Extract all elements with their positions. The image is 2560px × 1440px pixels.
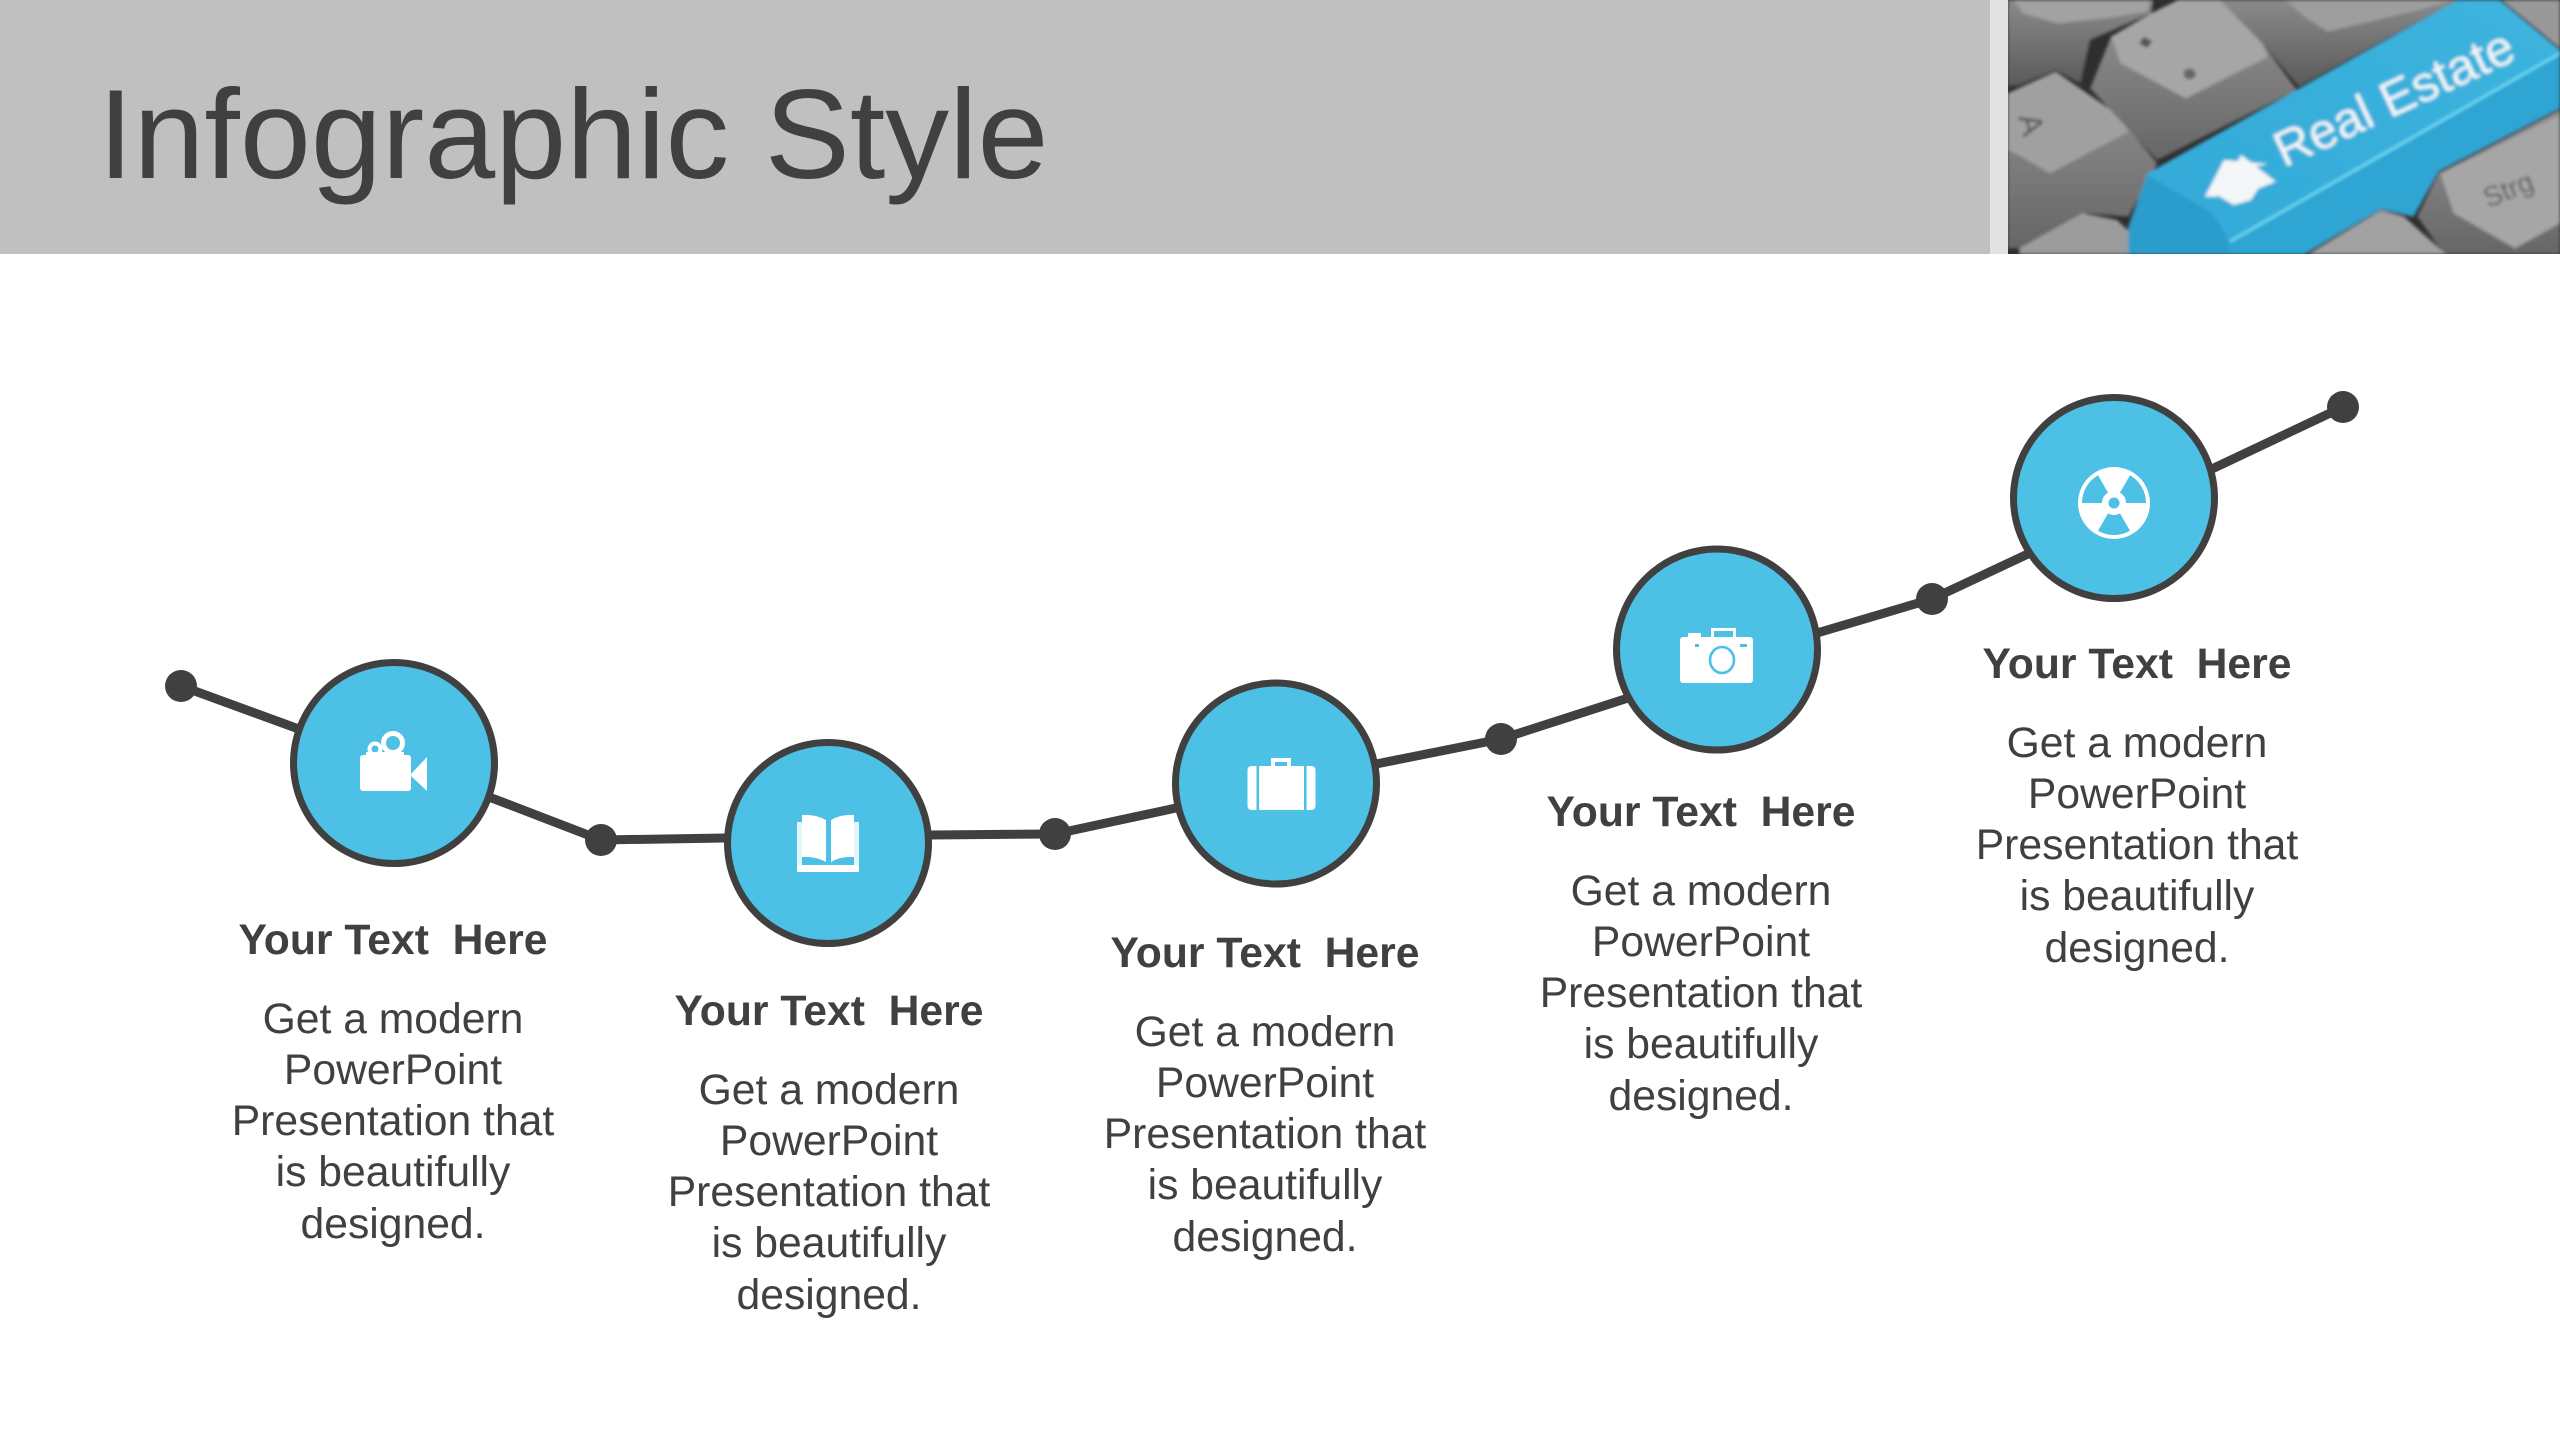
step 4 circle xyxy=(1616,549,1818,750)
A key xyxy=(2008,127,2158,250)
photo: keyboard with Real Estate key xyxy=(1990,0,2560,254)
text block: step 2: designed. xyxy=(736,1271,922,1319)
icon: open book xyxy=(797,815,859,872)
text block: step 3: Get a modern xyxy=(1135,1008,1395,1056)
Strg key xyxy=(2417,110,2560,254)
photo: keyboard with Real Estate key: Strg xyxy=(2479,166,2538,214)
text block: step 5: Presentation that xyxy=(1976,821,2298,869)
step 5 circle xyxy=(2014,398,2214,598)
text block: step 2: Your Text Here xyxy=(675,987,983,1035)
text block: step 4: Get a modern xyxy=(1571,866,1831,914)
text block: step 3: Your Text Here xyxy=(1111,929,1419,977)
upper right key xyxy=(2502,0,2560,48)
text block: step 3: is beautifully xyxy=(1148,1161,1382,1209)
step 3 circle xyxy=(1176,683,1376,884)
step 2 circle xyxy=(728,742,928,944)
title: Infographic Style xyxy=(98,63,1048,206)
text block: step 1: Get a modern xyxy=(263,994,523,1042)
text block: step 3: designed. xyxy=(1172,1213,1358,1261)
text block: step 5: Get a modern xyxy=(2007,718,2267,766)
bottom key xyxy=(2308,210,2446,254)
text block: step 4: Your Text Here xyxy=(1547,788,1855,836)
text block: step 1: designed. xyxy=(300,1200,486,1248)
text block: step 2 xyxy=(668,987,990,1319)
text block: step 1: Your Text Here xyxy=(239,916,547,964)
icon: photo camera xyxy=(1680,630,1753,683)
text block: step 3 xyxy=(1104,929,1426,1261)
text block: step 5: is beautifully xyxy=(2020,872,2254,920)
text block: step 4: Presentation that xyxy=(1540,969,1862,1017)
text block: step 1 xyxy=(232,916,554,1248)
photo: keyboard with Real Estate key: A xyxy=(2011,109,2052,140)
timeline dots xyxy=(165,391,2359,856)
photo: keyboard with Real Estate key: Real Estate xyxy=(2265,18,2523,178)
text block: step 2: PowerPoint xyxy=(720,1117,938,1165)
text block: step 4: PowerPoint xyxy=(1592,918,1810,966)
upper key xyxy=(2220,0,2458,87)
text block: step 1: PowerPoint xyxy=(284,1046,502,1094)
step 1 circle xyxy=(294,662,494,864)
text block: step 2: Get a modern xyxy=(699,1066,959,1114)
timeline line xyxy=(181,407,2343,840)
text block: step 5: PowerPoint xyxy=(2028,770,2246,818)
text block: step 3: PowerPoint xyxy=(1156,1059,1374,1107)
icon: video camera xyxy=(360,734,427,791)
text block: step 1: is beautifully xyxy=(276,1148,510,1196)
header band xyxy=(0,0,2560,254)
text block: step 1: Presentation that xyxy=(232,1097,554,1145)
text block: step 5: Your Text Here xyxy=(1983,640,2291,688)
text block: step 3: Presentation that xyxy=(1104,1110,1426,1158)
text block: step 5: designed. xyxy=(2044,924,2230,972)
middle key xyxy=(2089,36,2298,161)
text block: step 5 xyxy=(1976,640,2298,972)
text block: step 4: designed. xyxy=(1608,1072,1794,1120)
icon: radiation symbol xyxy=(2078,467,2150,539)
graphics layer xyxy=(165,0,2560,947)
blue key xyxy=(2128,0,2560,254)
text block: step 4 xyxy=(1540,788,1862,1120)
icon: briefcase xyxy=(1248,760,1316,810)
top-left key xyxy=(2008,0,2153,87)
text block: step 4: is beautifully xyxy=(1584,1020,1818,1068)
text block: step 2: is beautifully xyxy=(712,1219,946,1267)
bottom-left key xyxy=(2017,212,2132,254)
text block: step 2: Presentation that xyxy=(668,1168,990,1216)
